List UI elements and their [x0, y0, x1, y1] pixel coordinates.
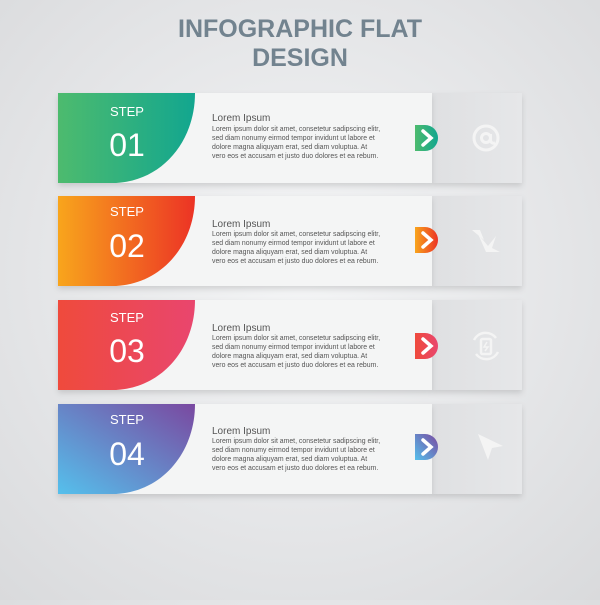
text block: Lorem ipsum dolor sit amet, consetetur sadipscing elitr,: [212, 231, 380, 238]
title: [178, 15, 422, 72]
text block: vero eos et accusam et justo duo dolores et ea rebum.: [212, 153, 378, 160]
text block: dolore magna aliquyam erat, sed diam voluptua. At: [212, 353, 367, 360]
step 4: 04: [109, 436, 145, 472]
gray side panel: [432, 93, 522, 183]
white panel: [58, 196, 432, 286]
text block: [212, 219, 380, 265]
arrow badge: [415, 227, 438, 253]
text block: dolore magna aliquyam erat, sed diam voluptua. At: [212, 144, 367, 151]
gray side panel: [432, 300, 522, 390]
text block: Lorem Ipsum: [212, 113, 270, 124]
text block: [212, 426, 380, 472]
text block: vero eos et accusam et justo duo dolores et ea rebum.: [212, 258, 378, 265]
step 3: STEP: [110, 310, 144, 325]
title: DESIGN: [252, 44, 348, 72]
text block: vero eos et accusam et justo duo dolores et ea rebum.: [212, 465, 378, 472]
text block: [212, 113, 380, 160]
title: INFOGRAPHIC FLAT: [178, 15, 422, 43]
icon: at: [474, 126, 498, 150]
icon: cursor: [478, 434, 503, 460]
step 1: [58, 93, 522, 183]
text block: [212, 323, 380, 369]
text block: Lorem Ipsum: [212, 323, 270, 334]
step 3: [58, 300, 522, 390]
white panel: [58, 300, 432, 390]
text block: sed diam nonumy eirmod tempor invidunt ut labore et: [212, 447, 375, 454]
text block: vero eos et accusam et justo duo dolores et ea rebum.: [212, 362, 378, 369]
text block: Lorem ipsum dolor sit amet, consetetur sadipscing elitr,: [212, 438, 380, 445]
arrow badge: [415, 125, 438, 151]
step 2: [58, 196, 522, 286]
step 1: 01: [109, 127, 145, 163]
colored tab: [58, 93, 195, 183]
step 3: 03: [109, 333, 145, 369]
gray side panel: [432, 404, 522, 494]
text block: Lorem Ipsum: [212, 219, 270, 230]
step 2: STEP: [110, 204, 144, 219]
icon: origami bird: [472, 230, 500, 252]
arrow badge: [415, 434, 438, 460]
colored tab: [58, 404, 195, 494]
text block: sed diam nonumy eirmod tempor invidunt ut labore et: [212, 240, 375, 247]
text block: sed diam nonumy eirmod tempor invidunt ut labore et: [212, 344, 375, 351]
text block: dolore magna aliquyam erat, sed diam voluptua. At: [212, 249, 367, 256]
arrow badge: [415, 333, 438, 359]
white panel: [58, 93, 432, 183]
colored tab: [58, 196, 195, 286]
colored tab: [58, 300, 195, 390]
step 4: [58, 404, 522, 494]
gray side panel: [432, 196, 522, 286]
icon: battery recycle: [474, 333, 498, 359]
text block: Lorem Ipsum: [212, 426, 270, 437]
text block: Lorem ipsum dolor sit amet, consetetur sadipscing elitr,: [212, 335, 380, 342]
white panel: [58, 404, 432, 494]
step 2: 02: [109, 228, 145, 264]
text block: dolore magna aliquyam erat, sed diam voluptua. At: [212, 456, 367, 463]
text block: sed diam nonumy eirmod tempor invidunt ut labore et: [212, 135, 375, 142]
step 1: STEP: [110, 104, 144, 119]
text block: Lorem ipsum dolor sit amet, consetetur sadipscing elitr,: [212, 126, 380, 133]
step 4: STEP: [110, 412, 144, 427]
